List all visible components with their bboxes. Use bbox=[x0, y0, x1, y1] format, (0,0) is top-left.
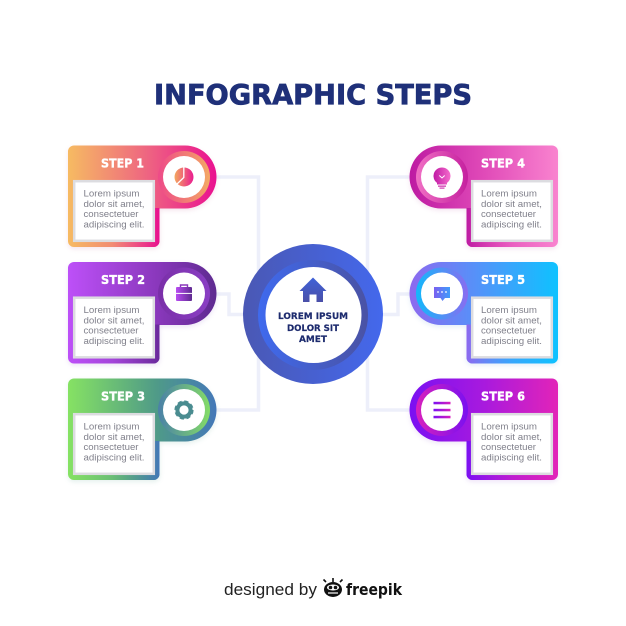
icon: gear bbox=[175, 401, 193, 419]
text block: step 6: adipiscing elit. bbox=[481, 452, 542, 463]
panel: step 3 bbox=[68, 378, 217, 482]
footer: designed by freepik: designed by bbox=[224, 580, 318, 599]
icon: pie chart bbox=[174, 168, 194, 186]
panel: step 1 bbox=[68, 146, 217, 249]
text block: step 1: adipiscing elit. bbox=[84, 219, 144, 230]
text block: step 6: consectetuer bbox=[481, 442, 537, 453]
text block: step 6 bbox=[472, 414, 552, 474]
panel: step 4 bbox=[410, 146, 558, 249]
text block: step 2: dolor sit amet, bbox=[84, 315, 144, 326]
text block: step 4: consectetuer bbox=[481, 209, 537, 220]
text block: step 5: dolor sit amet, bbox=[481, 315, 542, 326]
connector lines: left bbox=[214, 177, 258, 410]
icon: briefcase bbox=[176, 285, 192, 301]
icon: freepik mascot bbox=[324, 578, 342, 597]
footer: designed by freepik: freepik bbox=[346, 580, 402, 599]
footer: designed by freepik bbox=[224, 578, 402, 599]
text block: step 1: dolor sit amet, bbox=[84, 199, 144, 210]
title: INFOGRAPHIC STEPS bbox=[154, 78, 472, 111]
icon: chat bubble bbox=[434, 287, 450, 301]
heading: step 3: STEP 3 bbox=[101, 390, 145, 404]
text block: step 2: adipiscing elit. bbox=[84, 336, 144, 347]
text block: step 5: adipiscing elit. bbox=[481, 336, 542, 347]
hub text: DOLOR SIT bbox=[287, 323, 340, 334]
text block: step 5 bbox=[472, 298, 552, 357]
text block: step 3: Lorem ipsum bbox=[84, 422, 140, 432]
text block: step 4: Lorem ipsum bbox=[481, 188, 537, 200]
heading: step 4: STEP 4 bbox=[481, 156, 525, 172]
text block: step 4: adipiscing elit. bbox=[481, 219, 542, 230]
panel: step 6 bbox=[410, 378, 558, 482]
text block: step 2: consectetuer bbox=[84, 326, 139, 336]
text block: step 3 bbox=[74, 414, 154, 474]
heading: step 1: STEP 1 bbox=[101, 156, 144, 172]
panel: step 5 bbox=[410, 262, 558, 366]
text block: step 5: Lorem ipsum bbox=[481, 305, 537, 316]
hub text: AMET bbox=[299, 334, 328, 345]
icon: menu lines bbox=[434, 402, 450, 418]
text block: step 6: dolor sit amet, bbox=[481, 432, 542, 443]
hub text bbox=[278, 311, 348, 345]
text block: step 3: adipiscing elit. bbox=[84, 452, 144, 463]
text block: step 1: Lorem ipsum bbox=[84, 188, 140, 200]
icon: house bbox=[300, 278, 326, 302]
text block: step 2: Lorem ipsum bbox=[84, 305, 140, 316]
connector lines: right bbox=[368, 177, 412, 410]
text block: step 4: dolor sit amet, bbox=[481, 199, 542, 210]
text block: step 6: Lorem ipsum bbox=[481, 422, 537, 432]
hub text: LOREM IPSUM bbox=[278, 311, 348, 322]
text block: step 2 bbox=[74, 298, 154, 357]
heading: step 2: STEP 2 bbox=[101, 273, 145, 288]
heading: step 6: STEP 6 bbox=[481, 390, 525, 404]
text block: step 1: consectetuer bbox=[84, 209, 139, 220]
text block: step 1 bbox=[74, 181, 154, 241]
text block: step 3: consectetuer bbox=[84, 442, 139, 453]
text block: step 4 bbox=[472, 181, 552, 241]
heading: step 5: STEP 5 bbox=[481, 273, 525, 288]
central hub bbox=[243, 244, 383, 384]
text block: step 5: consectetuer bbox=[481, 326, 537, 336]
panel: step 2 bbox=[68, 262, 217, 366]
icon: light bulb bbox=[433, 167, 451, 189]
text block: step 3: dolor sit amet, bbox=[84, 432, 144, 443]
